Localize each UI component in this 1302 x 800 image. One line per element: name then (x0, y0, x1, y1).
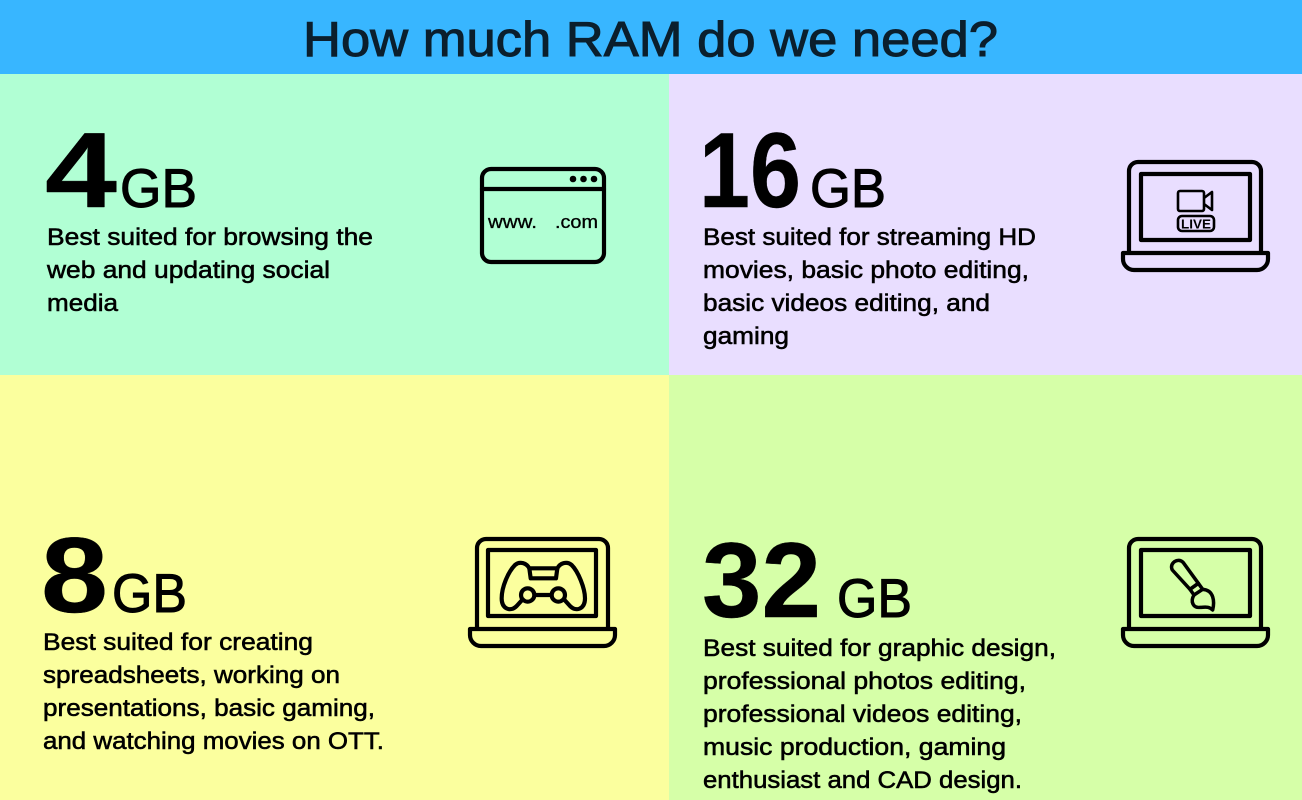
8 GB description: and watching movies on OTT. (43, 728, 384, 755)
16 GB description: gaming (703, 323, 789, 350)
32 GB heading: 32 (702, 520, 821, 640)
icon: browser window: www. (487, 212, 537, 232)
16 GB description: basic videos editing, and (703, 290, 990, 317)
4 GB description: media (47, 290, 119, 317)
16 GB description: Best suited for streaming HD (703, 224, 1036, 251)
32 GB description: professional photos editing, (703, 668, 1026, 695)
panel: 8 GB (0, 375, 669, 800)
icon: browser window: .com (555, 212, 598, 232)
icon: laptop with live video: LIVE (1181, 216, 1211, 232)
icon: browser window (482, 169, 604, 262)
8 GB heading: GB (112, 562, 187, 624)
panel: 16 GB (669, 74, 1302, 375)
4 GB heading (45, 110, 197, 230)
32 GB description: enthusiast and CAD design. (703, 767, 1022, 794)
icon: laptop with paintbrush (1123, 539, 1268, 646)
16 GB heading (699, 110, 886, 230)
panel: 32 GB (669, 375, 1302, 800)
16 GB description: movies, basic photo editing, (703, 257, 1029, 284)
8 GB description: spreadsheets, working on (43, 662, 340, 689)
32 GB heading: GB (837, 567, 912, 629)
8 GB heading (41, 515, 187, 635)
32 GB heading (702, 520, 912, 640)
32 GB description (703, 635, 1056, 794)
panel: 4 GB (0, 74, 669, 375)
32 GB description: Best suited for graphic design, (703, 635, 1056, 662)
16 GB heading: GB (810, 157, 886, 219)
8 GB heading: 8 (41, 515, 108, 635)
32 GB description: music production, gaming (703, 734, 1006, 761)
8 GB description: Best suited for creating (43, 629, 313, 656)
16 GB description (703, 224, 1036, 350)
32 GB description: professional videos editing, (703, 701, 1022, 728)
icon: laptop with live video (1123, 162, 1268, 270)
4 GB description: Best suited for browsing the (47, 224, 373, 251)
4 GB heading: 4 (45, 110, 117, 230)
title banner (0, 0, 1302, 74)
4 GB description: web and updating social (46, 257, 330, 284)
16 GB heading: 16 (699, 110, 801, 230)
4 GB heading: GB (120, 157, 197, 219)
8 GB description (43, 629, 384, 755)
8 GB description: presentations, basic gaming, (43, 695, 375, 722)
icon: laptop with game controller (470, 539, 615, 646)
4 GB description (46, 224, 373, 317)
title banner: How much RAM do we need? (303, 13, 998, 67)
